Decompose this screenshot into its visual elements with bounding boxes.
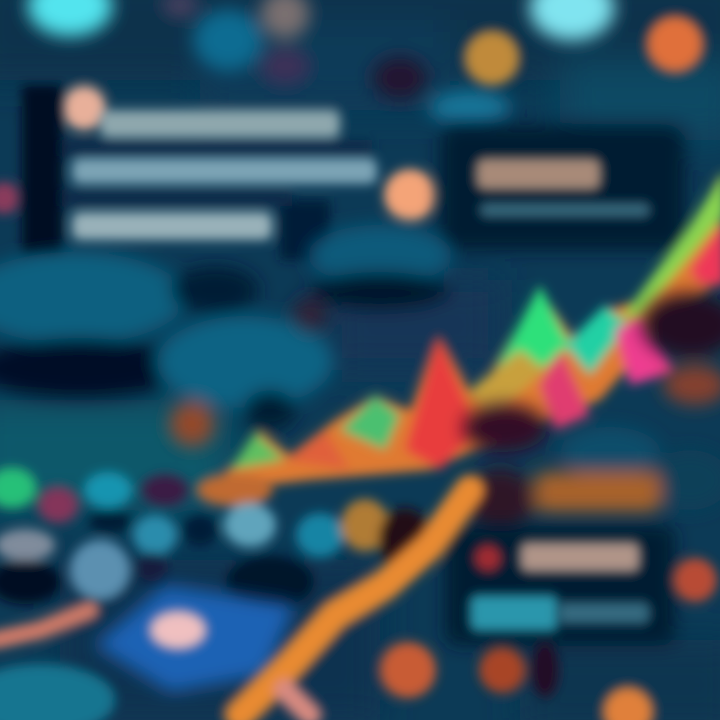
title panel dark bar: [22, 85, 372, 260]
rainbow mountain chart: [225, 170, 720, 490]
right info panel: [440, 125, 685, 250]
title text block, blurred: [72, 110, 377, 240]
lower right stat text: [445, 525, 675, 645]
orange trend line: [0, 490, 470, 715]
blue panel with highlight: [95, 585, 295, 692]
left dome panel: [0, 225, 452, 446]
bottom left icon grid: [0, 468, 431, 608]
bottom circle icons: [0, 558, 717, 720]
orange circle icons: [0, 16, 703, 221]
dark lower right panels: [463, 293, 720, 532]
top glow icons: [28, 0, 614, 126]
